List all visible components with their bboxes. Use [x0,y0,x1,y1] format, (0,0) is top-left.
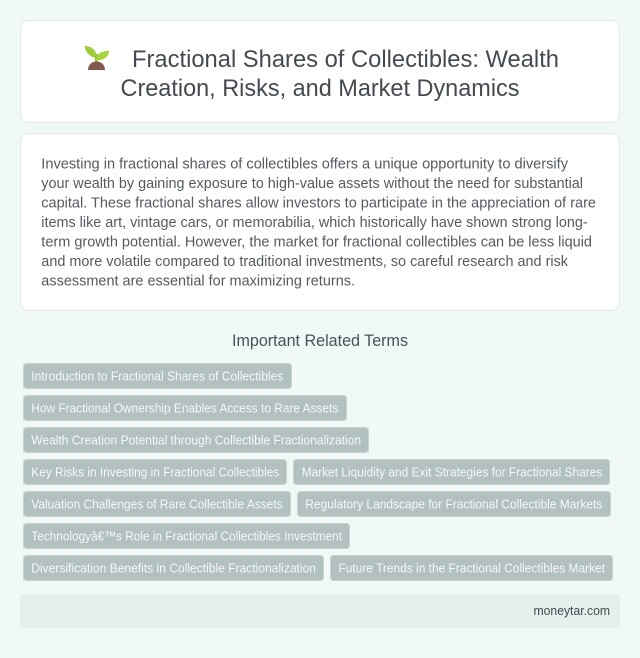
title text: Fractional Shares of Collectibles: Wealth [132,46,559,73]
tag: regulatory [298,492,610,516]
tag: market liquidity [294,460,610,484]
tag: future trends [330,556,612,580]
title text [120,46,559,102]
tag: fractional ownership: How Fractional Ownership Enables Access to Rare Assets [31,400,339,415]
related terms tags [24,364,612,580]
tag: valuation [24,492,290,516]
panel: introduction paragraph: assessment are essential for maximizing returns. [41,272,355,289]
panel: introduction paragraph: Investing in fractional shares of collectibles offers a unique opportunity to diversify [41,155,568,172]
panel: introduction paragraph: items like art, vintage cars, or memorabilia, which historically have shown strong long- [41,214,588,231]
panel: introduction paragraph: your wealth by gaining exposure to high-value assets without the need for substantial [41,175,583,192]
panel: introduction paragraph: and more volatile compared to traditional investments, so careful research and risk [41,253,568,270]
heading: related terms: Important Related Terms [232,332,408,350]
tag: key risks: Key Risks in Investing in Fractional Collectibles [31,464,280,479]
tag: wealth creation [24,428,368,452]
tag: valuation: Valuation Challenges of Rare Collectible Assets [31,496,283,511]
panel: introduction paragraph: term growth potential. However, the market for fractional collectibles can be less liquid [41,233,592,250]
tag: technology [24,524,350,548]
icon: seedling [85,46,109,70]
tag: fractional ownership [24,396,346,420]
tag: wealth creation: Wealth Creation Potential through Collectible Fractionalization [31,432,361,447]
footer bar [20,594,620,628]
title text: Creation, Risks, and Market Dynamics [120,75,520,102]
tag: introduction: Introduction to Fractional Shares of Collectibles [31,368,284,383]
tag: technology: Technologyâ€™s Role in Fractional Collectibles Investment [31,528,342,543]
tag: introduction [24,364,292,388]
tag: key risks [24,460,286,484]
panel: title header [20,20,620,122]
panel: introduction paragraph: capital. These fractional shares allow investors to participate in the appreciation of rare [41,194,596,211]
panel: introduction paragraph [20,134,620,310]
tag: diversification [24,556,324,580]
tag: regulatory: Regulatory Landscape for Fractional Collectible Markets [305,496,603,511]
tag: diversification: Diversification Benefits in Collectible Fractionalization [31,560,316,575]
footer bar: moneytar.com [534,603,610,618]
tag: future trends: Future Trends in the Fractional Collectibles Market [338,560,605,575]
tag: market liquidity: Market Liquidity and Exit Strategies for Fractional Shares [302,464,603,479]
